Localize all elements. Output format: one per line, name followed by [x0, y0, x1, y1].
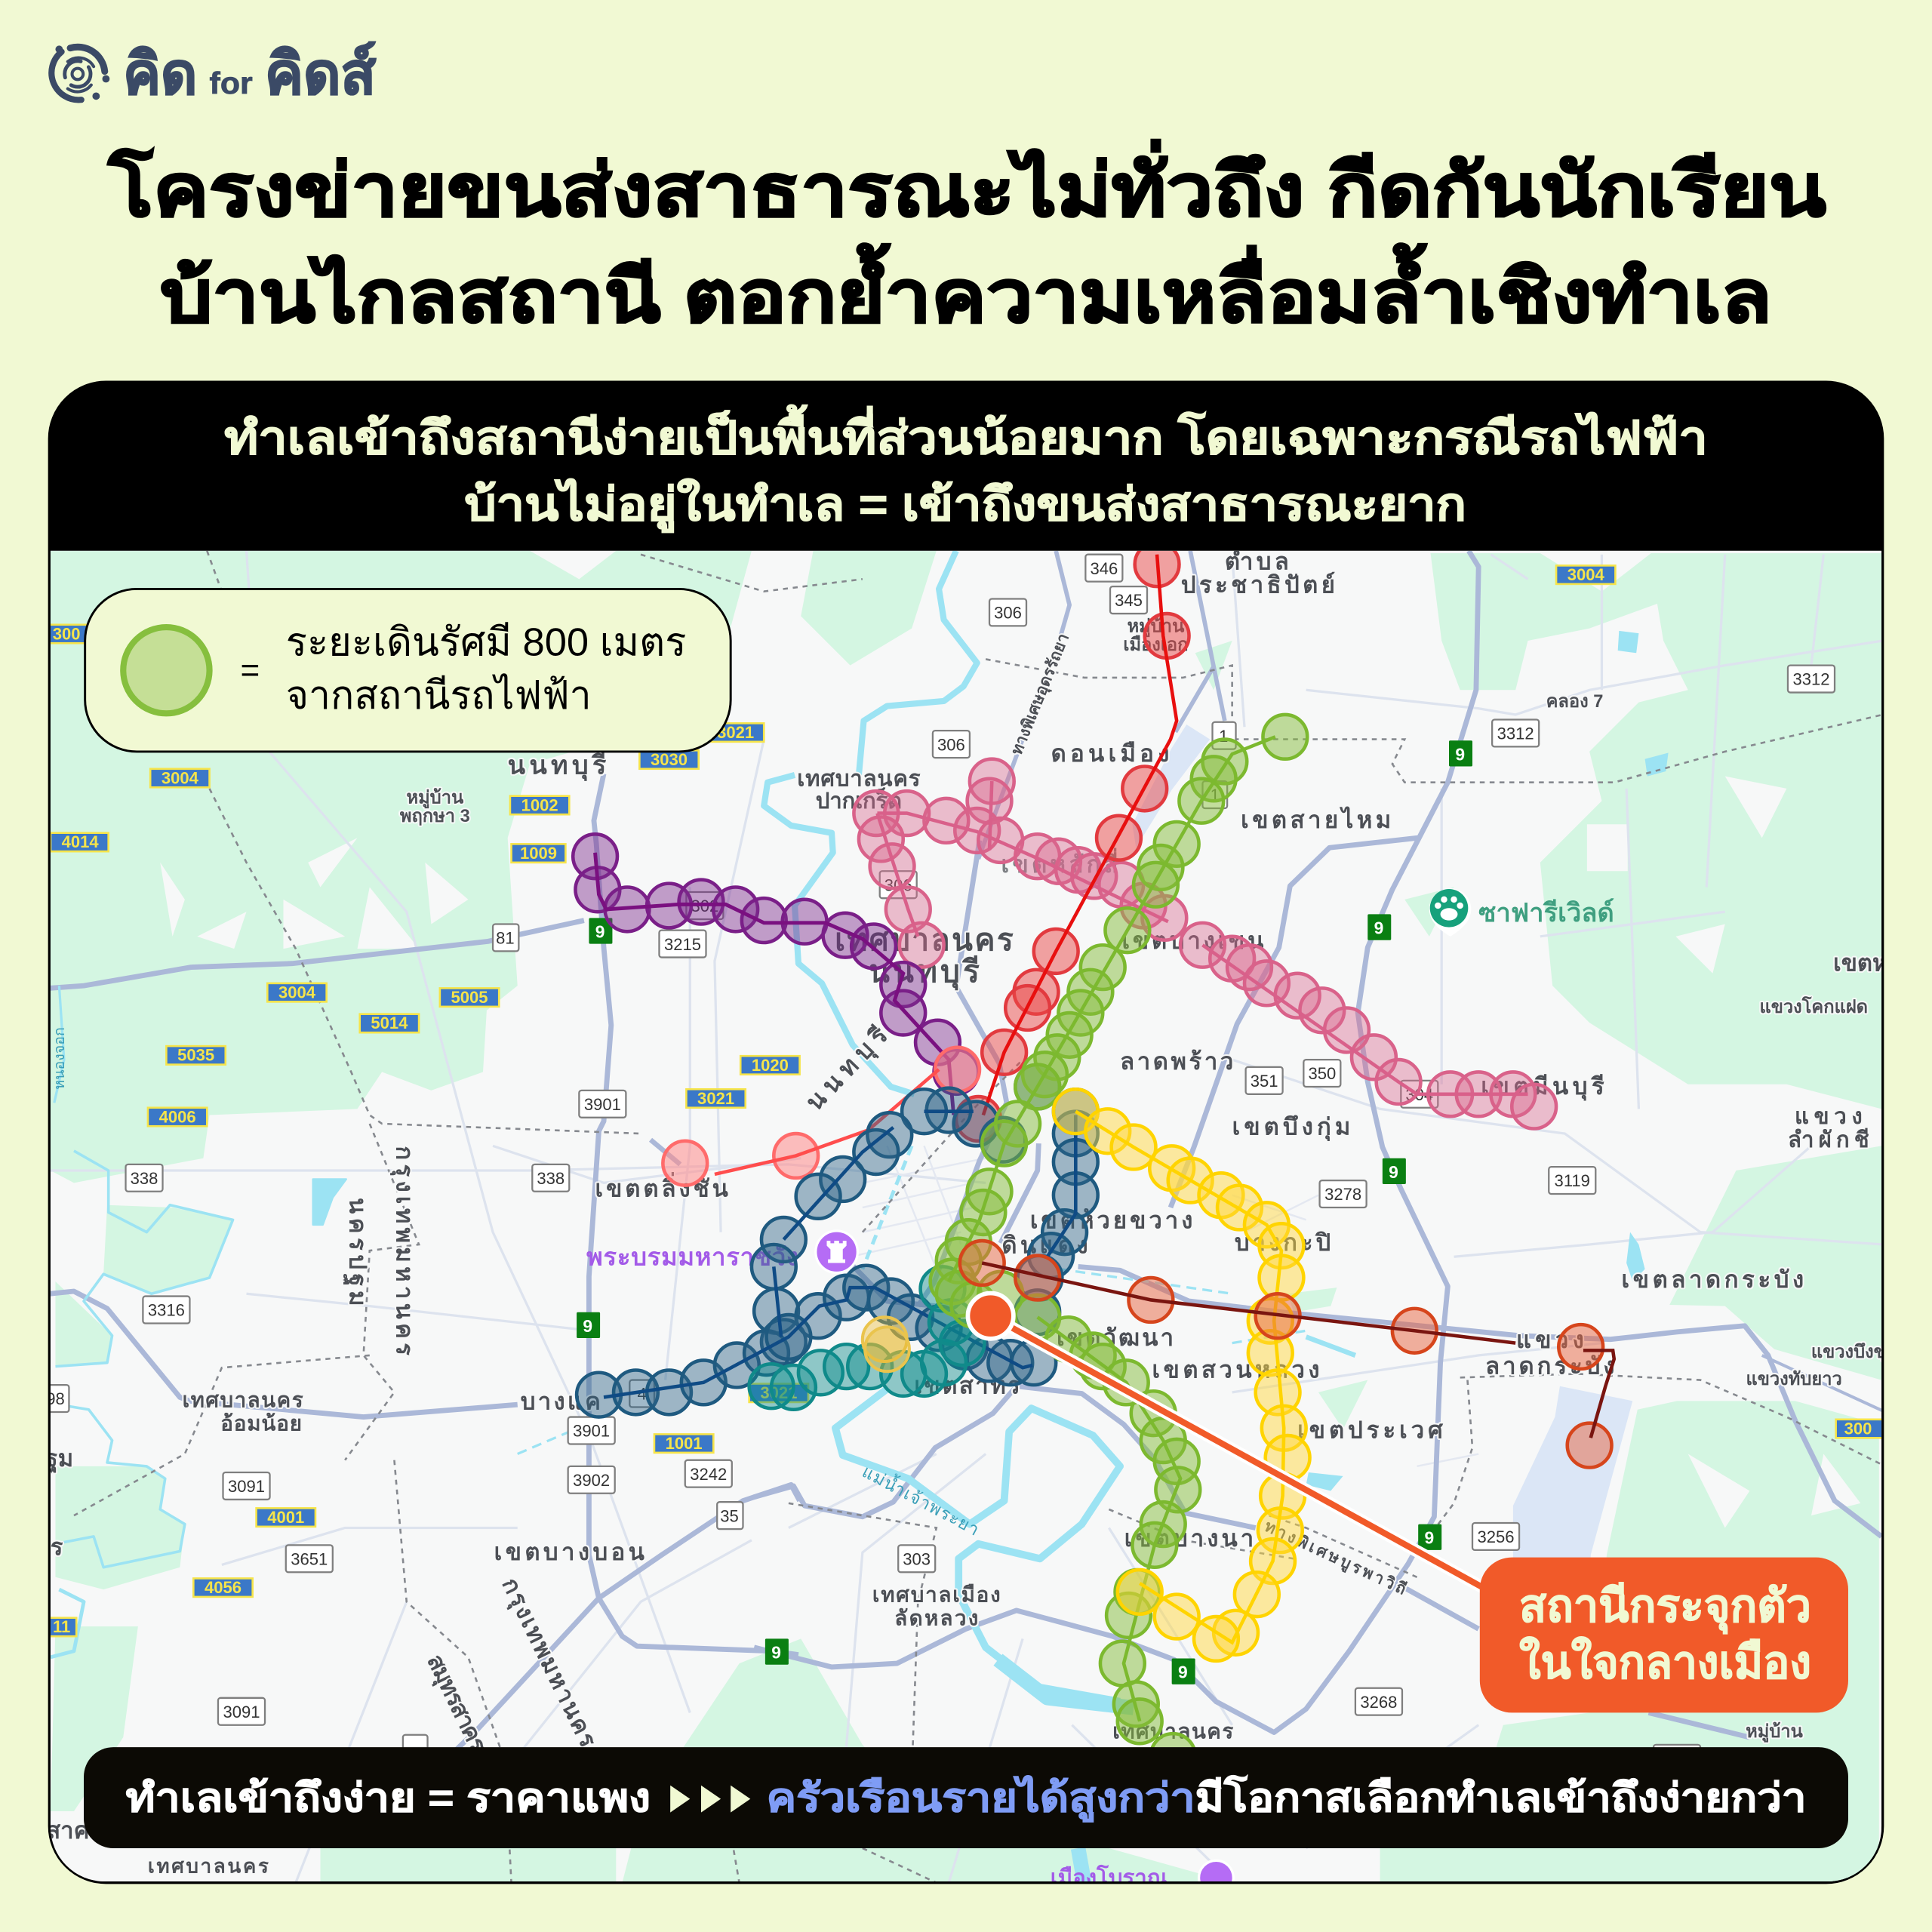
map place labels: เขตบางนา — [1124, 1525, 1254, 1552]
highway shields: blue: 300 — [1844, 1419, 1872, 1438]
highway shields: white: 3268 — [1360, 1693, 1397, 1712]
map place labels: อ้อมน้อย — [220, 1412, 302, 1435]
legend text: จากสถานีรถไฟฟ้า — [286, 673, 592, 718]
transit lines: gold line — [863, 1317, 909, 1371]
highway shields: white: 3256 — [1478, 1527, 1515, 1546]
transit lines: pink line — [854, 759, 1556, 1129]
highway shields: white: 306 — [937, 735, 965, 754]
map place labels: สาค — [46, 1817, 89, 1844]
map place labels: แขวงโคกแฝด — [1759, 995, 1868, 1017]
map place labels: ทางพิเศษบูรพาวิถี — [1261, 1517, 1409, 1600]
highway shields: blue: 5014 — [371, 1014, 408, 1032]
map place labels: แขวงทับยาว — [1746, 1370, 1842, 1389]
highway shields: white: 338 — [131, 1169, 158, 1188]
logo wordmark: คิด — [123, 42, 197, 106]
highway shields: white: 35 — [720, 1506, 739, 1525]
highway shields: white — [37, 555, 1835, 1767]
map place labels: นครปฐม — [343, 1198, 371, 1306]
bottom banner — [84, 1747, 1848, 1848]
map place labels: หมู่บ้าน — [1746, 1721, 1804, 1743]
callout anchor dot — [968, 1293, 1014, 1339]
river and purple POI labels: พระบรมมหาราชวัง — [586, 1243, 798, 1271]
icon: purple marker bottom — [1199, 1860, 1233, 1895]
map place labels — [45, 548, 1897, 1878]
map place labels: กรุงเทพมหานคร — [390, 1146, 418, 1355]
transit lines: purple line — [573, 834, 978, 1115]
highway shields: white: 3242 — [690, 1465, 727, 1484]
transit lines: teal line — [749, 1266, 984, 1410]
highway shields: green: 9 — [1374, 918, 1383, 938]
highway shields: white: 3312 — [1792, 670, 1830, 689]
highway shields: green: 9 — [1178, 1663, 1188, 1682]
highway shields: blue: 5035 — [177, 1046, 214, 1065]
highway shields: blue: 3021 — [697, 1089, 734, 1108]
highway shields: white: 3901 — [584, 1095, 621, 1114]
map place labels: ดอนเมือง — [1051, 740, 1169, 767]
map place labels: หมู่บ้าน — [1128, 617, 1185, 638]
highway shields: blue: 3004 — [162, 768, 199, 787]
highway shields: green: 9 — [771, 1643, 781, 1663]
map place labels: พฤกษา 3 — [400, 807, 470, 826]
highway shields: blue: 11 — [53, 1617, 70, 1636]
highway shields: green: 9 — [1455, 744, 1465, 764]
map place labels: เขตห — [1833, 950, 1888, 977]
map place labels: เทศบาลนคร — [797, 767, 921, 792]
map place labels: เขตสายไหม — [1241, 806, 1391, 833]
highway shields: white: 306 — [884, 875, 912, 894]
map place labels: ตำบล — [1225, 548, 1289, 574]
rivers — [51, 551, 1355, 1883]
icon: logo swirl — [51, 45, 109, 100]
highway shields: white: 81 — [496, 929, 515, 948]
map place labels: ฐม — [45, 1445, 73, 1474]
map place labels: เขตสวนหลวง — [1152, 1356, 1320, 1383]
legend circle sample — [123, 627, 210, 713]
map place labels: นนทบุรี — [508, 751, 607, 781]
map base — [37, 542, 1897, 1895]
map place labels: เขตบางเขน — [1122, 928, 1263, 954]
map place labels: แขวงบึงขุ่ม — [1811, 1343, 1897, 1363]
highway shields: white: 3651 — [291, 1549, 328, 1568]
map place labels: เขตประเวศ — [1297, 1417, 1444, 1443]
logo wordmark: for — [210, 66, 253, 100]
title — [108, 140, 1826, 337]
callout pointer line — [968, 1293, 1491, 1592]
highway shields: blue: 5005 — [451, 988, 488, 1007]
highway shields: white: 3312 — [1497, 724, 1534, 743]
map place labels: เขตบึงกุ่ม — [1232, 1114, 1350, 1142]
highway shields: blue: 4001 — [267, 1508, 304, 1527]
highway shields: blue: 3021 — [760, 1383, 797, 1402]
highway shields: blue: 4006 — [159, 1107, 196, 1126]
map place labels: นนทบุรี — [800, 1021, 895, 1118]
map place labels: บางแค — [521, 1389, 601, 1415]
map place labels: คลอง 7 — [1546, 692, 1603, 712]
white gaps in green — [160, 777, 1860, 1527]
highway shields: blue: 3004 — [278, 983, 316, 1001]
highway shields: white: 1 — [1219, 727, 1228, 746]
panel background — [49, 382, 1883, 1883]
highway shields: blue: 4056 — [205, 1578, 242, 1597]
airports — [1132, 724, 1632, 1601]
panel header bar: บ้านไม่อยู่ในทำเล = เข้าถึงขนส่งสาธารณะยาก — [465, 478, 1466, 533]
map place labels: แขวง — [1795, 1104, 1863, 1129]
highway shields: white: 3278 — [1324, 1185, 1361, 1204]
map place labels: เขตวัฒนา — [1057, 1324, 1174, 1351]
icon: palace marker — [816, 1231, 857, 1273]
highway shields: blue: 4014 — [62, 832, 99, 851]
highway shields: white: 3316 — [148, 1301, 185, 1320]
legend equals sign: = — [241, 652, 260, 689]
map place labels: หมู่บ้าน — [406, 787, 464, 808]
minor roads — [51, 551, 1883, 1883]
motorways — [49, 551, 1883, 1762]
panel: map with header — [37, 382, 1897, 1895]
panel header bar: ทำเลเข้าถึงสถานีง่ายเป็นพื้นที่ส่วนน้อยมาก โดยเฉพาะกรณีรถไฟฟ้า — [224, 405, 1708, 463]
highway shields: white: 3901 — [573, 1422, 610, 1441]
map place labels: ประชาธิปัตย์ — [1181, 571, 1335, 598]
map place labels: ลาดพร้าว — [1120, 1048, 1233, 1075]
callout: stations concentrated — [1480, 1558, 1848, 1712]
highway shields: green: 9 — [595, 921, 605, 941]
map place labels: ดินแดง — [1001, 1232, 1088, 1258]
highway shields: green: 9 — [1389, 1162, 1398, 1182]
map place labels: ลำผักชี — [1788, 1128, 1869, 1152]
transit lines: red line — [956, 542, 1189, 1141]
highway shields: white: 1 — [1211, 786, 1220, 804]
callout: stations concentrated: ในใจกลางเมือง — [1519, 1636, 1811, 1688]
highway shields: blue: 1002 — [521, 795, 558, 814]
transit lines: navy line — [577, 1065, 1098, 1417]
map place labels: เขตมีนบุรี — [1481, 1073, 1604, 1101]
highway shields: white: 304 — [1405, 1085, 1433, 1104]
river and purple POI labels: เมืองโบราณ — [1051, 1864, 1168, 1890]
map place labels: สมุทรสาคร — [420, 1651, 492, 1757]
highway shields: white: 303 — [903, 1549, 931, 1568]
bottom banner: ทำเลเข้าถึงง่าย = ราคาแพง — [126, 1777, 651, 1820]
banner arrows — [670, 1786, 750, 1813]
transit lines: airport rail link — [663, 1048, 980, 1186]
highway shields: white: 3091 — [223, 1703, 260, 1721]
highway shields: blue: 3004 — [1567, 565, 1604, 584]
green areas — [51, 551, 1883, 1883]
panel header bar — [49, 382, 1883, 551]
map place labels: เทศบาลนคร — [183, 1388, 303, 1411]
logo — [51, 42, 376, 106]
river and purple POI labels: หนองจอก — [51, 1027, 68, 1090]
highway shields: blue: 1009 — [520, 844, 557, 863]
map place labels: กรุงเทพมหานคร — [496, 1574, 601, 1752]
highway shields: blue — [37, 565, 1895, 1636]
logo wordmark: คิดส์ — [265, 42, 376, 106]
map place labels: แขวง — [1516, 1327, 1584, 1353]
ponds — [1306, 631, 1669, 1491]
map place labels: บางกะปิ — [1235, 1229, 1331, 1256]
highway shields: white: 345 — [1115, 591, 1143, 610]
highway shields: blue: 1001 — [666, 1434, 703, 1453]
map place labels: เขตลาดกระบัง — [1622, 1266, 1804, 1293]
highway shields: blue: 3030 — [651, 750, 688, 769]
highway shields: white: 3902 — [573, 1471, 610, 1490]
callout: stations concentrated: สถานีกระจุกตัว — [1519, 1580, 1811, 1635]
highway shields: blue: 3021 — [717, 723, 754, 742]
bottom banner: ครัวเรือนรายได้สูงกว่า — [767, 1775, 1195, 1823]
highway shields: white: 338 — [537, 1169, 565, 1188]
map place labels: ทางพิเศษอุดรรัถยา — [1008, 631, 1074, 758]
map place labels: เมืองเอก — [1123, 635, 1188, 655]
administrative boundaries — [74, 551, 1885, 1883]
highway shields: white: 351 — [1251, 1072, 1278, 1091]
map place labels: เทศบาลเมือง — [872, 1583, 1001, 1606]
map place labels: ร — [51, 1534, 63, 1560]
legend — [85, 589, 731, 752]
highway shields: white: 98 — [46, 1389, 65, 1408]
river and purple POI labels — [51, 1027, 1168, 1890]
legend text — [286, 621, 686, 718]
highway shields: green: 9 — [583, 1316, 592, 1336]
transit lines: yellow line — [1054, 1089, 1310, 1661]
bottom banner: มีโอกาสเลือกทำเลเข้าถึงง่ายกว่า — [1195, 1774, 1806, 1820]
highway shields: white: 350 — [1308, 1064, 1336, 1083]
title: บ้านไกลสถานี ตอกย้ำความเหลื่อมล้ำเชิงทำเล — [160, 243, 1772, 337]
highway shields: white: 346 — [1090, 559, 1118, 578]
highway shields: white: 306 — [994, 604, 1022, 623]
map place labels: ลัดหลวง — [894, 1606, 978, 1629]
highway shields: white: 4 — [637, 1385, 647, 1404]
map place labels: เทศบาลนคร — [835, 922, 1014, 957]
highway shields: green — [577, 740, 1472, 1684]
transit lines: orange line — [960, 1241, 1614, 1467]
icon: safari world pin — [1429, 888, 1471, 937]
map place labels: นนทบุรี — [869, 954, 980, 991]
transit lines: green line — [931, 715, 1307, 1778]
map place labels: เขตบางบอน — [494, 1539, 645, 1565]
map place labels: ปากเกร็ด — [816, 787, 902, 814]
logo wordmark — [123, 42, 376, 106]
legend text: ระยะเดินรัศมี 800 เมตร — [286, 621, 686, 665]
highway shields: white: 3215 — [664, 935, 701, 954]
dense city streets — [851, 1146, 1478, 1466]
map place labels: เขตห้วยขวาง — [1030, 1208, 1192, 1234]
map place labels: ลาดกระบัง — [1485, 1352, 1615, 1379]
highway shields: white: 3091 — [228, 1477, 265, 1496]
highway shields: blue: 300 — [53, 624, 81, 643]
map place labels: เขตหลักสี่ — [1001, 848, 1118, 878]
map place labels: เขตสาทร — [914, 1373, 1020, 1399]
highway shields: white: 302 — [691, 897, 718, 915]
highway shields: white: 3119 — [1555, 1171, 1590, 1190]
title: โครงข่ายขนส่งสาธารณะไม่ทั่วถึง กีดกันนักเรียน — [108, 140, 1826, 232]
river and purple POI labels: แม่น้ำเจ้าพระยา — [859, 1460, 983, 1540]
map place labels: เทศบาลนคร — [148, 1855, 269, 1878]
highway shields: green: 9 — [1425, 1528, 1434, 1548]
map place labels: เทศบาลนคร — [1112, 1720, 1233, 1743]
highway shields: blue: 1020 — [752, 1056, 789, 1075]
safari world label: ซาฟารีเวิลด์ — [1478, 898, 1614, 928]
map place labels: เขตตลิ่งชัน — [595, 1171, 728, 1201]
